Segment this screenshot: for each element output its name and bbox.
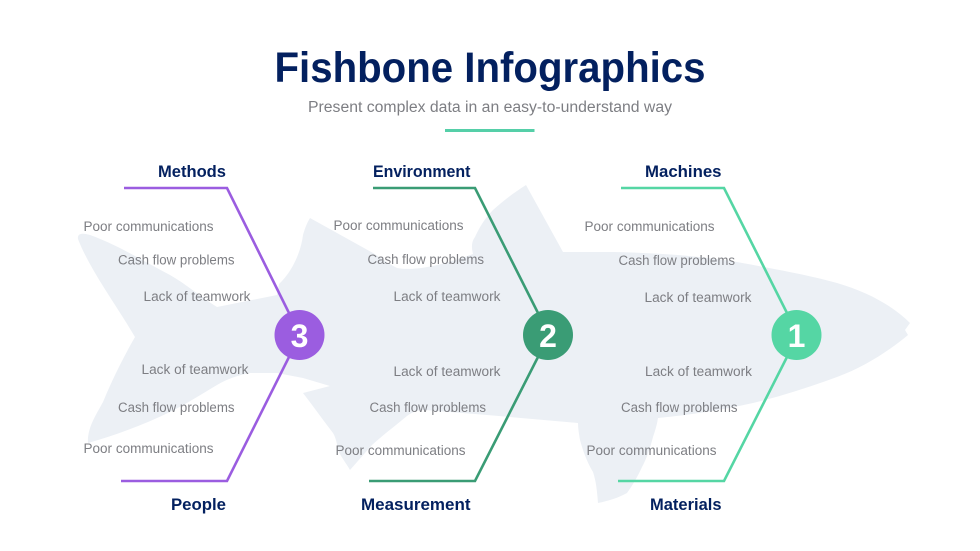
causes list [334,218,501,458]
causes list: Lack of teamwork [394,364,501,379]
causes list: Lack of teamwork [644,290,752,305]
causes list: Cash flow problems [368,252,484,267]
heading: measurement: Measurement [361,496,471,514]
number badge 3: 3 [291,318,308,354]
causes list: Cash flow problems [621,400,738,415]
causes list: Cash flow problems [118,400,235,415]
number badge 3 [274,310,324,360]
subtitle: Present complex data in an easy-to-understand way [308,99,672,116]
causes list [584,219,752,458]
title accent rule [445,129,534,132]
heading: machines: Machines [645,163,722,181]
causes list: Lack of teamwork [142,362,249,377]
causes list: Poor communications [336,443,466,458]
causes list: Lack of teamwork [645,364,752,379]
heading: people: People [171,496,226,514]
causes list: Poor communications [586,443,717,458]
causes list: Poor communications [84,219,214,234]
heading: materials: Materials [650,496,722,514]
bone lines [121,188,289,481]
causes list: Lack of teamwork [144,289,251,304]
causes list: Cash flow problems [370,400,486,415]
causes list [84,219,251,456]
causes list: Lack of teamwork [394,289,501,304]
number badge 2: 2 [539,318,557,354]
number badge 2 [523,310,573,360]
number badge 1 [772,310,822,360]
fish silhouette background [78,185,910,503]
causes list: Cash flow problems [618,253,735,268]
title: Fishbone Infographics [274,44,706,92]
panel: group 2 environment and measurement [334,163,573,514]
number badge 1: 1 [788,318,805,354]
causes list: Poor communications [584,219,715,234]
causes list: Cash flow problems [118,252,235,268]
causes list: Poor communications [334,218,464,233]
heading: methods: Methods [158,163,226,181]
causes list: Poor communications [84,441,214,456]
bone lines [369,188,538,481]
bone lines [618,188,787,481]
panel: group 3 methods and people [84,163,324,514]
heading: environment: Environment [373,163,471,181]
panel: group 1 machines and materials [584,163,822,514]
